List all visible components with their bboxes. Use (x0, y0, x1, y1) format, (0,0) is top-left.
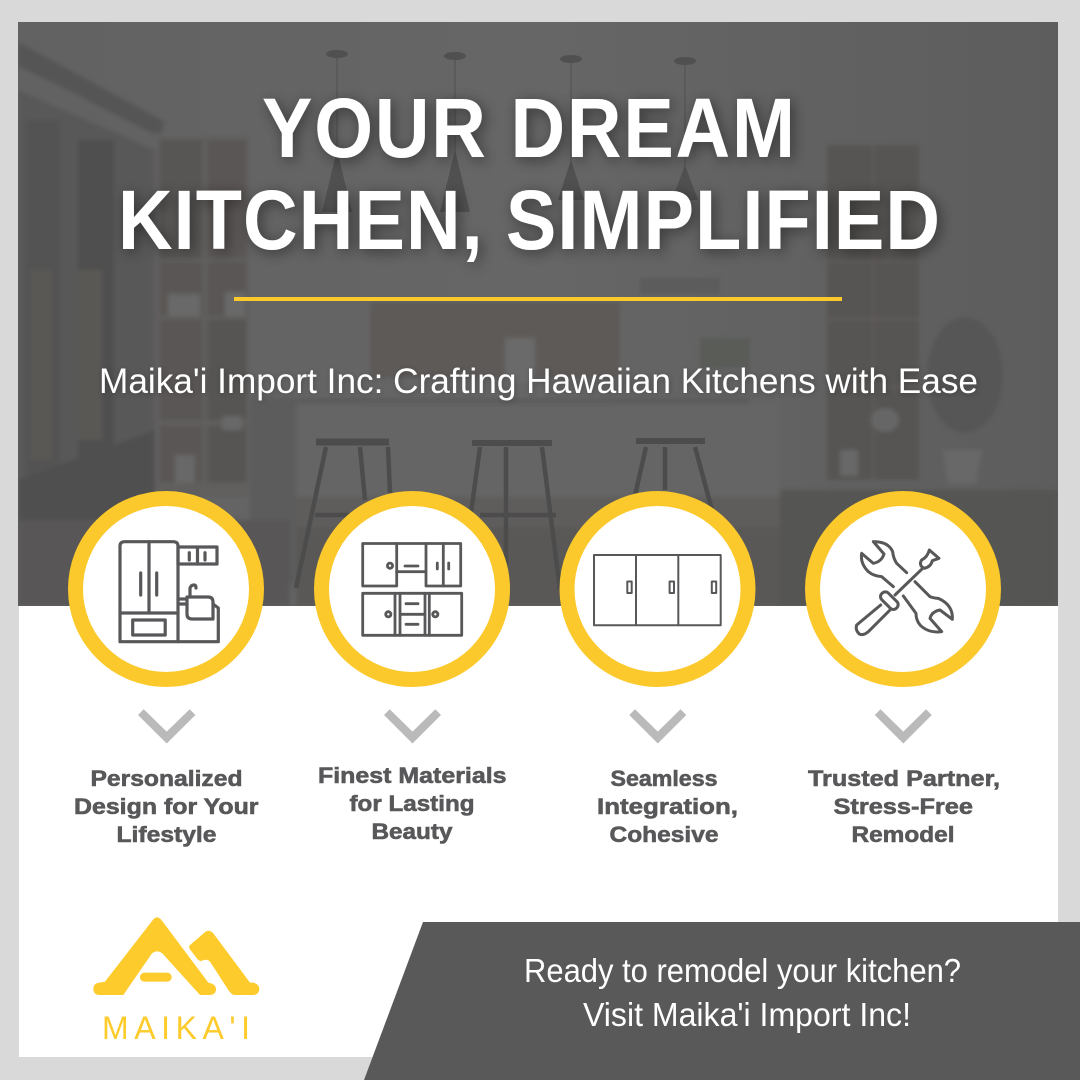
label 3: Cohesive (610, 822, 718, 847)
title: YOUR DREAM (262, 81, 795, 175)
logo wordmark: MAIKA'I (102, 1010, 250, 1046)
feature 3: seamless integration (567, 498, 748, 680)
label 4: Stress-Free (834, 794, 973, 819)
title (118, 81, 940, 267)
icon: kitchen with fridge and sink (120, 542, 218, 642)
badge circle (322, 498, 502, 680)
label 1: Design for Your (74, 794, 259, 819)
badge circle (567, 498, 748, 680)
label 4 (808, 766, 1000, 847)
icon: kitchen cabinets (363, 544, 462, 635)
logo mark (93, 917, 259, 995)
title: KITCHEN, SIMPLIFIED (118, 173, 940, 267)
subtitle: Maika'i Import Inc: Crafting Hawaiian Kitchens with Ease (99, 362, 978, 401)
label 1 (74, 766, 259, 847)
icon: three-door cabinet (594, 555, 721, 625)
feature 1: personalized design (76, 498, 256, 680)
call to action text (524, 952, 961, 1033)
hero: darkened kitchen photo (18, 22, 1058, 606)
label 1: Personalized (90, 766, 242, 791)
label 3 (597, 766, 738, 847)
pendant lights (322, 50, 698, 212)
call to action banner (364, 922, 1080, 1080)
yellow divider (234, 297, 842, 301)
badge circle (76, 498, 256, 680)
chevrons (138, 709, 932, 744)
feature 4: trusted partner (812, 498, 994, 680)
bar stools (296, 441, 712, 590)
label 3: Seamless (610, 766, 718, 791)
label 3: Integration, (597, 794, 738, 819)
label 2: Finest Materials (318, 763, 506, 788)
icon: wrench and screwdriver (856, 542, 952, 635)
call to action text: Visit Maika'i Import Inc! (583, 996, 911, 1033)
label 1: Lifestyle (116, 822, 216, 847)
label 2: for Lasting (350, 791, 474, 816)
label 4: Trusted Partner, (808, 766, 1000, 791)
badge circle (812, 498, 994, 680)
call to action text: Ready to remodel your kitchen? (524, 952, 961, 989)
label 4: Remodel (852, 822, 954, 847)
feature 2: finest materials (322, 498, 502, 680)
logo (93, 917, 259, 1046)
label 2: Beauty (372, 819, 453, 844)
label 2 (318, 763, 506, 844)
